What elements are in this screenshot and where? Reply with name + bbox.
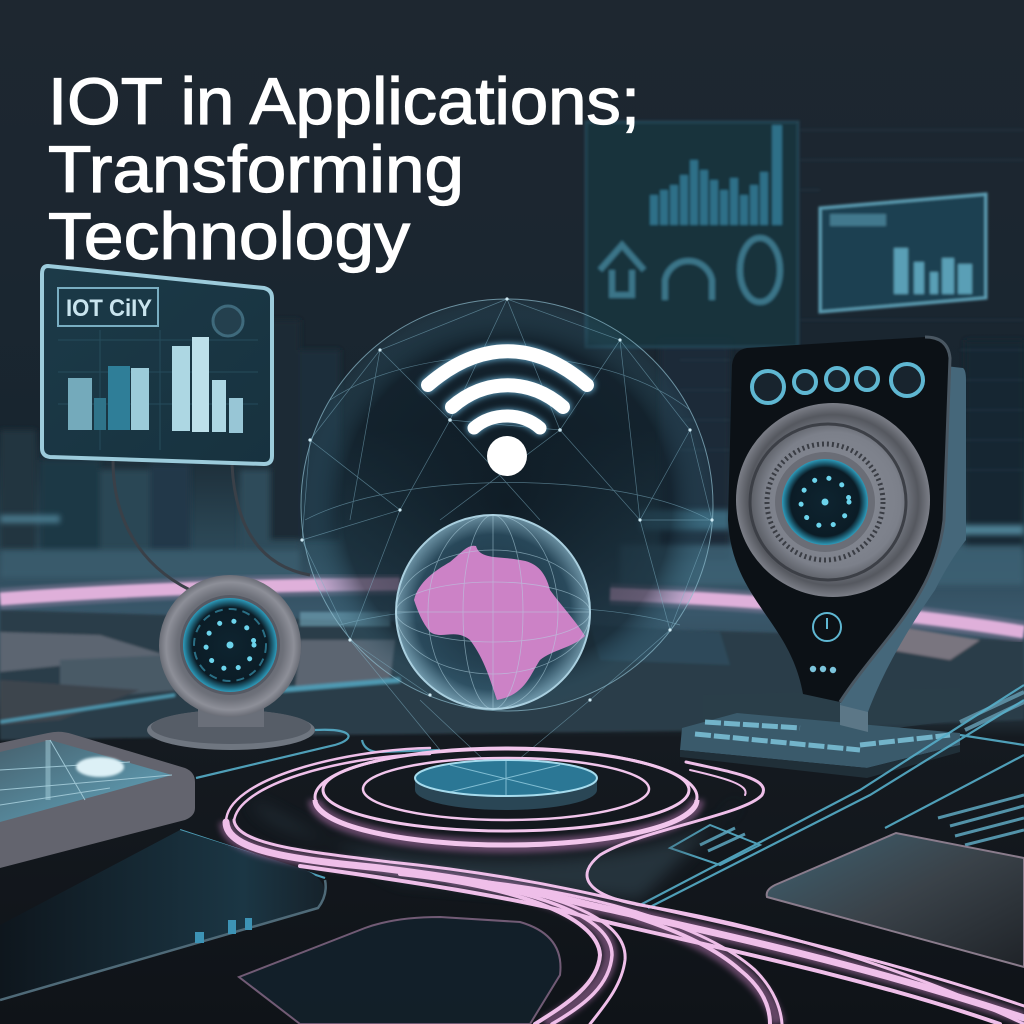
- distant gauges: [600, 238, 780, 302]
- screen label: IOT CiIY: [66, 295, 152, 322]
- rings: [315, 748, 697, 846]
- distant dashboard panel: [586, 122, 798, 347]
- icon: wifi: [428, 351, 587, 476]
- glow layer: [226, 800, 1024, 1024]
- distant bar chart: [650, 125, 782, 225]
- title: IOT in Applications;: [48, 64, 640, 138]
- circuit floor lines: [180, 685, 1024, 908]
- left dashboard screen: [42, 266, 310, 590]
- reflection under rings: [250, 800, 740, 900]
- power button: [813, 613, 841, 641]
- blurred mid floor with slabs: [0, 610, 1024, 740]
- dark tablet right: [767, 833, 1024, 967]
- title: Technology: [48, 199, 410, 273]
- floor detail bars: [700, 795, 1024, 851]
- status dots: [810, 666, 836, 673]
- tablet device left: [0, 732, 195, 868]
- pink rings and flowing fibre lines: [226, 748, 1024, 1024]
- smart camera pin device: [680, 337, 1024, 778]
- phone slab: [0, 830, 326, 1000]
- main lens: [736, 403, 930, 597]
- lower floor plate outline: [239, 917, 560, 1024]
- device base: [680, 688, 1024, 778]
- wireframe sphere: [300, 297, 714, 775]
- small sensor device: [147, 575, 315, 750]
- distant right screen: [820, 194, 986, 312]
- pink horizon band: [0, 584, 1024, 632]
- title: [48, 64, 640, 273]
- pedestal: [415, 760, 597, 810]
- globe with pink continent: [396, 515, 590, 709]
- indicator lights: [752, 364, 923, 403]
- fibre bundle: [226, 748, 1024, 1024]
- title: Transforming: [48, 132, 464, 206]
- screen label: [58, 288, 158, 326]
- screen bar chart: [68, 306, 243, 433]
